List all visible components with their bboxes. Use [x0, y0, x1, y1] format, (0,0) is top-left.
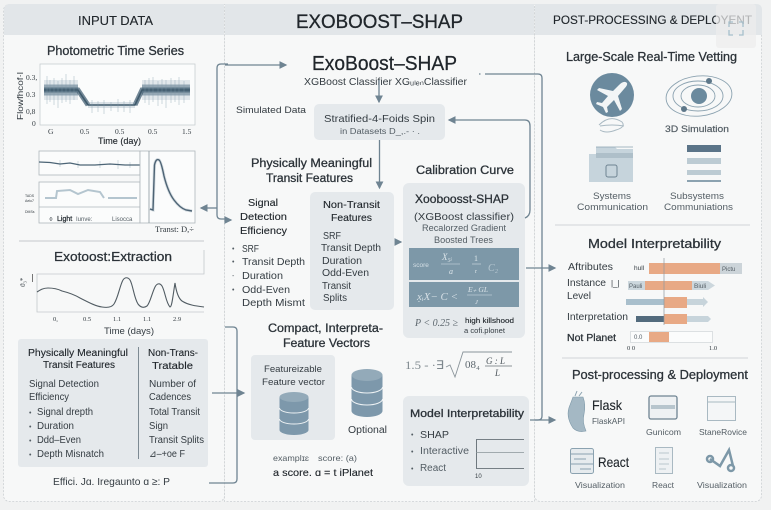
list: signal detection efficiency: SRF	[242, 244, 259, 255]
icon: flask	[568, 391, 586, 432]
label: simulated data: Simulated Data	[236, 105, 307, 116]
list: signal detection efficiency: Efficiency	[240, 225, 288, 237]
label: stanerovice: StaneRovice	[699, 427, 747, 437]
formula panel: score: C₂	[488, 263, 499, 274]
list: signal detection efficiency: Signal	[248, 197, 278, 209]
panel: transit feature table: ⊿–+oe F	[149, 449, 185, 460]
label: subsystems communications	[664, 191, 733, 213]
heading: input data	[4, 4, 224, 35]
chart: photometric light curve: 1.5	[182, 127, 192, 136]
label: gunicorn: Gunicom	[646, 427, 681, 437]
panel: transit feature table: Ddd–Even	[37, 435, 81, 446]
heading: post-processing: POST-PROCESSING & DEPLOYENT	[553, 13, 753, 27]
chart: extraction curve	[19, 250, 204, 337]
chart: shap attribution bars: Pictu	[722, 267, 735, 273]
box: xgboost classifier: (XGBoost classifier)	[414, 211, 514, 223]
icon: database	[280, 392, 308, 435]
formula panel: score: a	[449, 267, 453, 276]
box: xgboost classifier: Recalorzed Gradient	[422, 223, 507, 233]
box: non-transit features	[310, 192, 394, 310]
heading: post-processing and deployment: Post-processing & Deployment	[572, 368, 749, 382]
box: xgboost classifier: high killshood	[465, 316, 514, 325]
label: systems communication: Systems	[593, 191, 631, 202]
box: feature vector: Feature vector	[262, 377, 325, 388]
chart: extraction curve: 1.1	[113, 316, 121, 323]
box: model interpretability: •	[411, 466, 414, 473]
label: flask: Flask	[592, 397, 623, 413]
heading: input data: INPUT DATA	[78, 14, 154, 28]
chart: shap attribution bars: Aftributes	[568, 261, 613, 273]
formula: square root expression: G : L	[486, 356, 505, 366]
chart: shap attribution bars	[567, 258, 742, 352]
panel: transit feature table: Non-Trans-	[148, 348, 198, 359]
icon: gunicorn server	[649, 396, 677, 419]
chart: photometric light curve: 0,8	[26, 107, 36, 116]
arrow: folds to features	[378, 140, 380, 188]
chart: shap attribution bars: Instance	[567, 277, 606, 289]
formula panel: threshold: x̣ᵢX− C <	[416, 291, 458, 303]
subtitle: classifier: XGBoost Classifier XGᵤₗₑₙClassifier	[304, 76, 468, 88]
box: xgboost classifier: P < 0.25 ≥	[414, 318, 458, 329]
heading: photometric time series: Photometric Time Series	[47, 44, 184, 58]
label: visualization tool: Visualization	[697, 480, 747, 490]
panel: transit feature table: Sign	[149, 421, 168, 432]
box: non-transit features: Odd-Even	[322, 268, 369, 279]
list: signal detection efficiency: Odd-Even	[242, 285, 290, 296]
chart: photometric light curve: Flowfhcof·l	[15, 72, 25, 120]
panel: transit feature table: Number of	[149, 379, 196, 390]
caption: example score: a score. ɑ = t iPlanet	[273, 467, 373, 479]
icon: folder	[589, 147, 633, 182]
chart: light curve legend strip: Lisocca	[112, 217, 133, 223]
panel: post-processing and deployment	[534, 4, 762, 502]
box: feature vector: Featureizable	[264, 364, 322, 375]
chart: photometric light curve: 0.5	[115, 127, 125, 136]
heading: large-scale vetting: Large-Scale Real-Time Vetting	[566, 50, 737, 64]
formula panel: score: 1	[474, 254, 478, 263]
panel: input data	[4, 4, 224, 502]
panel: transit feature table: •	[29, 452, 32, 459]
list: signal detection efficiency: Transit Depth	[242, 257, 305, 268]
panel: transit feature table: Signal drepth	[37, 407, 93, 418]
box: non-transit features: Non-Transit	[323, 199, 380, 211]
box: stratified folds	[314, 104, 445, 140]
chart: photometric light curve: G	[48, 127, 54, 136]
formula panel: score: r	[475, 269, 477, 275]
chart: photometric light curve: 0.5	[148, 127, 158, 136]
panel: transit feature table: •	[29, 438, 32, 445]
formula panel: score: score	[413, 262, 429, 269]
label: optional: Optional	[348, 425, 387, 436]
chart: light curve legend strip: ⌽	[49, 216, 53, 223]
chart: transit detail curve	[140, 151, 195, 234]
icon: orbit simulation	[664, 73, 734, 119]
chart: shap attribution bars: Not Planet	[567, 332, 616, 344]
box: stratified folds: Stratified-4-Foids Spin	[324, 113, 435, 125]
chart: photometric light curve: 0.5	[80, 127, 90, 136]
box: model interpretability: React	[420, 463, 446, 474]
panel: transit feature table: •	[29, 424, 32, 431]
heading: physically meaningful transit features: Physically Meaningful	[251, 158, 372, 170]
list: signal detection efficiency: •	[232, 246, 235, 253]
label: systems communication	[577, 191, 648, 213]
chart: extraction curve: Time (days)	[104, 326, 154, 337]
formula: square root expression: L	[494, 368, 500, 378]
box: xgboost classifier: Boosted Trees	[434, 235, 493, 245]
list: signal detection efficiency: •	[232, 259, 235, 266]
box: xgboost classifier: a cofi.plonet	[464, 326, 506, 335]
title: exoboost-shap model: ExoBoost–SHAP	[312, 53, 457, 75]
formula: square root expression: 08₄	[465, 359, 480, 371]
box: model interpretability: •	[411, 449, 414, 456]
chart: light curve legend strip: Aelo7	[25, 199, 34, 203]
heading: compact feature vectors: Feature Vectors	[283, 338, 370, 350]
icon: plane badge	[590, 73, 634, 132]
list: signal detection efficiency: •	[232, 287, 235, 294]
arrow: feature bracket	[209, 327, 244, 483]
chart: extraction curve: 0.5	[83, 316, 91, 323]
box: non-transit features: Transit	[322, 281, 351, 292]
formula panel: threshold	[409, 282, 519, 307]
chart: photometric light curve: 0.3,	[26, 73, 37, 82]
arrow: signal stub	[225, 219, 231, 221]
arrow: output bracket	[479, 74, 555, 420]
panel: transit feature table: •	[29, 410, 32, 417]
box: non-transit features: Features	[331, 212, 372, 224]
panel: transit feature table: Tratable	[152, 361, 193, 372]
chart: flat light curve strip	[39, 151, 140, 175]
icon: react dashboard	[570, 448, 594, 474]
caption: efficiency footer: Effici. Jɑ. Iregaunto ɑ ≥: P	[53, 476, 170, 488]
chart: shap attribution bars: Interpretation	[567, 311, 628, 323]
heading: physically meaningful transit features: Transit Features	[266, 173, 353, 185]
chart: light curve legend strip: DMSs	[25, 210, 35, 214]
arrow: calibration loop	[449, 120, 530, 218]
panel: transit feature table: Cadences	[149, 392, 191, 403]
label: subsystems communications: Communiations	[664, 202, 733, 213]
formula panel: threshold: E₊ GL	[467, 285, 488, 294]
formula panel: threshold: J	[475, 299, 479, 306]
box: stratified folds: in Datasets D_,.- · .	[340, 127, 420, 136]
label: flask	[592, 397, 625, 426]
icon: document	[656, 448, 672, 474]
box: non-transit features: SRF	[323, 231, 341, 242]
chart: shap attribution bars: 0.0	[634, 335, 643, 341]
box: model interpretability: Interactive	[420, 446, 469, 457]
chart: shap attribution bars: Pauli	[629, 284, 642, 290]
box: non-transit features: Transit Depth	[321, 243, 381, 254]
box: xgboost classifier: Xooboosst-SHAP	[415, 192, 509, 206]
chart: transit detail curve: Transt: D,÷	[155, 224, 194, 234]
chart: shap attribution bars: Biuli	[694, 283, 706, 290]
label: visualization: Visualization	[575, 480, 625, 490]
chart: photometric light curve: 0.3	[26, 90, 36, 99]
heading: exoboost-shap	[225, 4, 534, 35]
list: signal detection efficiency: -	[232, 273, 235, 280]
panel: transit feature table: Total Transit	[149, 407, 200, 418]
chart: shap attribution bars: 1.0	[709, 345, 717, 352]
box: feature vector	[251, 355, 335, 440]
heading: compact feature vectors	[268, 323, 383, 350]
label: 3d simulation: 3D Simulation	[665, 124, 729, 135]
panel: exoboost-shap	[224, 4, 534, 502]
icon: optional database	[352, 369, 382, 417]
heading: model interpretability: Model Interpretability	[588, 236, 722, 251]
label: react tool: React	[652, 480, 675, 490]
box: model interpretability	[403, 396, 529, 486]
chart: extraction curve: ϑ₃*	[19, 277, 27, 287]
chart: extraction curve: 2.9	[173, 316, 181, 323]
label: react: React	[598, 454, 629, 470]
box: model interpretability: Model Interpretability	[410, 408, 525, 420]
panel: transit feature table: Transit Splits	[149, 435, 204, 446]
panel: transit feature table: Depth Misnatch	[37, 449, 104, 460]
arrow: classifier to folds	[378, 80, 380, 102]
box: non-transit features: Duration	[322, 256, 362, 267]
box: model interpretability: SHAP	[420, 429, 449, 441]
label: subsystems communications: Subsystems	[670, 191, 724, 202]
icon: stacked bars	[687, 145, 721, 182]
chart: shap attribution bars: Level	[567, 290, 591, 302]
chart: shap attribution bars: |_|	[611, 279, 620, 288]
panel: transit feature table	[18, 339, 208, 467]
caption: example score: examplɪɛ	[273, 453, 309, 463]
box: xgboost classifier	[403, 183, 525, 338]
heading: calibration curve: Calibration Curve	[416, 165, 514, 177]
formula panel: score	[409, 248, 519, 280]
heading: extraction: Exotoost:Extraction	[54, 249, 172, 264]
list: signal detection efficiency: Detection	[240, 211, 287, 223]
heading: compact feature vectors: Compact, Interpreta-	[268, 323, 383, 335]
heading: exoboost-shap: EXOBOOST–SHAP	[296, 12, 463, 33]
chart: mini interpretability plot: 10	[475, 474, 482, 480]
chart: light curve legend strip: TADS	[25, 194, 35, 198]
icon: service window	[708, 396, 736, 420]
chart: light curve legend strip: Light	[57, 216, 72, 223]
formula: square root expression: 1.5 - ·∃	[405, 358, 444, 372]
label: flask: FlaskAPI	[592, 416, 625, 426]
icon: visualization nodes	[707, 450, 734, 471]
arrow: non-transit to classifier	[395, 241, 401, 243]
chart: photometric light curve	[15, 64, 195, 147]
chart: light curve legend strip	[25, 182, 140, 223]
panel: transit feature table: Duration	[37, 421, 74, 432]
panel: transit feature table: Efficiency	[29, 392, 69, 403]
list: signal detection efficiency	[232, 197, 305, 309]
formula: square root expression	[405, 352, 512, 378]
list: signal detection efficiency: Depth Mismt	[242, 298, 305, 309]
caption: example score	[273, 453, 373, 479]
chart: light curve legend strip: Iunve:	[76, 217, 93, 223]
icon: fullscreen overlay	[716, 4, 756, 48]
panel: transit feature table: Physically Meaningful	[28, 348, 128, 359]
chart: photometric light curve: 0	[32, 119, 36, 128]
panel: transit feature table: Transit Features	[43, 360, 115, 371]
chart: photometric light curve: Time (day)	[98, 136, 141, 147]
caption: example score: score: (a)	[318, 453, 357, 463]
panel: transit feature table: Signal Detection	[29, 379, 99, 390]
formula panel: score: X₅ᵢ	[441, 252, 453, 262]
heading: physically meaningful transit features	[251, 158, 372, 185]
heading: post-processing	[535, 4, 762, 35]
chart: shap attribution bars: 0 0	[627, 345, 635, 352]
chart: extraction curve: 1.1	[143, 316, 151, 323]
chart: shap attribution bars: hull	[634, 265, 645, 272]
box: model interpretability: •	[411, 432, 414, 439]
box: non-transit features: Splits	[323, 293, 347, 304]
label: systems communication: Communication	[577, 202, 648, 213]
arrow: input to transit detail and model	[201, 64, 286, 219]
chart: extraction curve: 0,	[53, 316, 58, 323]
list: signal detection efficiency: Duration	[242, 271, 283, 282]
